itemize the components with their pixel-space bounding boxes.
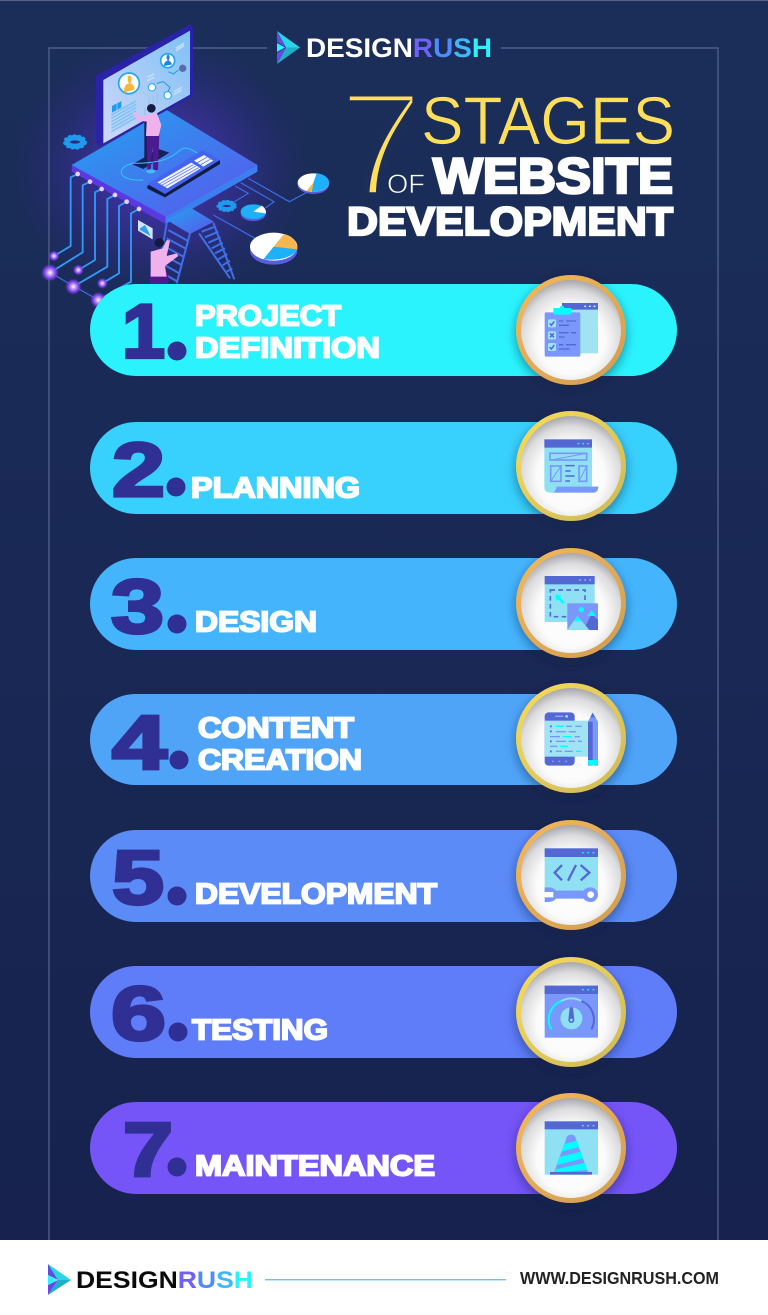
icon badge xyxy=(516,683,626,793)
icon: maintenance cone xyxy=(545,1121,598,1175)
stage 6 panel xyxy=(90,957,677,1067)
chart card xyxy=(138,220,153,239)
footer wordmark: DESIGN RUSH xyxy=(76,1267,253,1294)
number dot xyxy=(168,1022,188,1042)
gear left xyxy=(64,135,86,149)
number dot xyxy=(166,478,186,496)
keyboard xyxy=(147,150,220,197)
standing person xyxy=(133,104,161,173)
footer divider xyxy=(265,1279,506,1280)
pie chart small xyxy=(298,173,329,194)
title: DEVELOPMENT: DEVELOPMENT xyxy=(347,200,673,244)
pie chart large xyxy=(250,233,297,265)
label line 2: DEFINITION xyxy=(195,332,380,364)
frame xyxy=(49,48,718,1240)
footer band xyxy=(0,1240,768,1315)
footer logo icon xyxy=(48,1264,71,1295)
number dot xyxy=(168,1158,186,1176)
label: TESTING xyxy=(192,1014,328,1046)
monitor xyxy=(96,24,193,147)
platform xyxy=(72,110,257,224)
icon badge xyxy=(516,411,626,521)
label: MAINTENANCE xyxy=(195,1150,435,1182)
icon badge xyxy=(516,820,626,930)
stand xyxy=(132,122,169,169)
number 3: 3 xyxy=(111,564,164,650)
icon badge xyxy=(516,275,626,385)
pill xyxy=(90,422,677,514)
number dot xyxy=(168,342,186,360)
footer url: WWW.DESIGNRUSH.COM xyxy=(520,1268,719,1288)
illustration: isometric website workstation xyxy=(41,24,329,308)
logo: DesignRush header xyxy=(277,31,492,64)
icon: wireframe page xyxy=(544,439,598,493)
ladder xyxy=(157,207,234,283)
label: PROJECT xyxy=(195,300,342,332)
pie chart medium xyxy=(241,204,266,221)
pill xyxy=(90,694,677,785)
title xyxy=(338,60,675,244)
icon badge xyxy=(516,1093,626,1203)
pill xyxy=(90,558,677,650)
title: WEBSITE: WEBSITE xyxy=(433,148,673,204)
gear right xyxy=(217,201,236,211)
illustration glow xyxy=(10,35,310,305)
icon badge xyxy=(516,548,626,658)
number 7: 7 xyxy=(123,1108,173,1193)
label: DEVELOPMENT xyxy=(195,878,438,910)
number dot xyxy=(168,886,186,906)
icon badge xyxy=(516,957,626,1067)
pill xyxy=(90,830,677,922)
label line 2: CREATION xyxy=(198,744,362,776)
logo icon xyxy=(277,31,300,64)
icon: speed gauge xyxy=(545,986,598,1038)
number dot xyxy=(170,750,188,770)
pill xyxy=(90,1102,677,1194)
logo wordmark: DESIGNRUSH xyxy=(306,33,492,63)
circuit nodes xyxy=(41,251,108,308)
stage 1 panel xyxy=(90,275,677,385)
stage 3 panel xyxy=(90,548,677,658)
label: CONTENT xyxy=(198,712,355,744)
pill xyxy=(90,966,677,1058)
stage 7 panel xyxy=(90,1093,677,1203)
number 4: 4 xyxy=(112,700,167,786)
stage 4 panel xyxy=(90,683,677,793)
cable xyxy=(121,148,198,180)
data lines to charts xyxy=(213,178,308,238)
number 6: 6 xyxy=(111,972,166,1057)
icon: code window and wrench xyxy=(545,848,598,902)
icon: clipboard xyxy=(545,303,598,357)
icon: design window xyxy=(545,576,598,630)
stage 2 panel xyxy=(90,411,677,521)
stage 5 panel xyxy=(90,820,677,930)
number 1: 1 xyxy=(122,290,165,374)
number 5: 5 xyxy=(112,836,164,921)
climbing person xyxy=(150,238,178,287)
number dot xyxy=(168,614,186,634)
label: PLANNING xyxy=(191,472,360,504)
circuit lines xyxy=(50,174,139,300)
number 2: 2 xyxy=(112,428,165,513)
icon: phone and pencil xyxy=(545,712,598,766)
label: DESIGN xyxy=(195,606,317,638)
title: OF: OF xyxy=(387,169,425,199)
title: STAGES: STAGES xyxy=(421,83,675,159)
pill xyxy=(90,284,677,376)
title: 7: 7 xyxy=(338,60,424,228)
